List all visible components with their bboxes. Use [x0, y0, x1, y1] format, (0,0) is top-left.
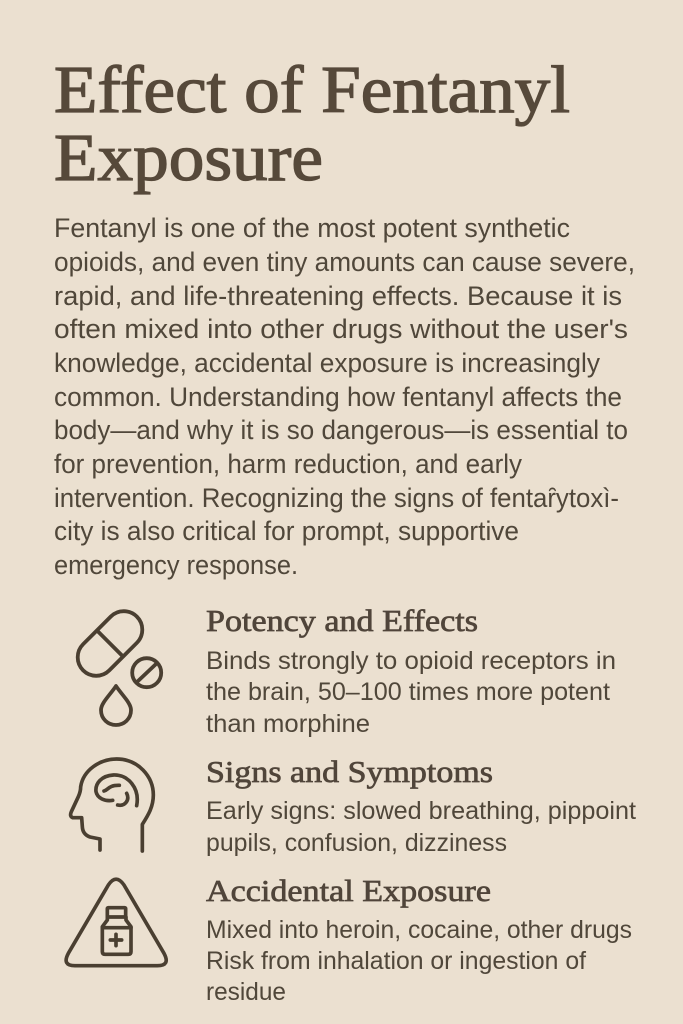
- text: exposure description: residue: [206, 978, 286, 1006]
- section: accidental exposure: [206, 873, 632, 1006]
- intro paragraph: opioids, and even tiny amounts can cause severe,: [54, 247, 635, 277]
- icon: head with brain: [71, 759, 153, 851]
- intro paragraph: emergency response.: [54, 550, 298, 580]
- intro paragraph: knowledge, accidental exposure is increasingly: [54, 348, 600, 378]
- intro paragraph: common. Understanding how fentanyl affects the: [54, 382, 622, 412]
- intro paragraph: rapid, and life-threatening effects. Because it is: [54, 281, 622, 311]
- icon: capsule, tablet and drop: [70, 604, 161, 725]
- intro paragraph: [54, 213, 635, 580]
- intro paragraph: Fentanyl is one of the most potent synthetic: [54, 213, 570, 243]
- intro paragraph: intervention. Recognizing the signs of fentaȓytoxì-: [54, 483, 619, 513]
- text: symptoms description: Early signs: slowed breathing, pippoint: [206, 797, 636, 825]
- section: potency and effects: [206, 603, 616, 738]
- title: Effect of Fentanyl: [54, 53, 570, 127]
- icon: warning triangle with medicine bottle: [66, 879, 166, 966]
- text: exposure description: [206, 916, 632, 1006]
- text: potency description: than morphine: [206, 710, 370, 738]
- intro paragraph: for prevention, harm reduction, and early: [54, 449, 522, 479]
- text: symptoms description: pupils, confusion, dizziness: [206, 829, 507, 857]
- text: exposure description: Mixed into heroin, cocaine, other drugs: [206, 916, 632, 944]
- heading: accidental exposure: Accidental Exposure: [206, 873, 491, 908]
- text: symptoms description: [206, 797, 636, 857]
- intro paragraph: often mixed into other drugs without the user's: [54, 314, 628, 344]
- text: exposure description: Risk from inhalation or ingestion of: [206, 947, 586, 975]
- text: potency description: the brain, 50–100 times more potent: [206, 678, 610, 706]
- text: potency description: Binds strongly to opioid receptors in: [206, 647, 616, 675]
- title: Exposure: [54, 121, 323, 195]
- text: potency description: [206, 647, 616, 738]
- intro paragraph: body—and why it is so dangerous—is essential to: [54, 415, 628, 445]
- heading: signs and symptoms: Signs and Symptoms: [206, 754, 493, 789]
- heading: potency and effects: Potency and Effects: [206, 603, 478, 638]
- intro paragraph: city is also critical for prompt, supportive: [54, 516, 519, 546]
- title: [54, 53, 570, 195]
- section: signs and symptoms: [206, 754, 636, 857]
